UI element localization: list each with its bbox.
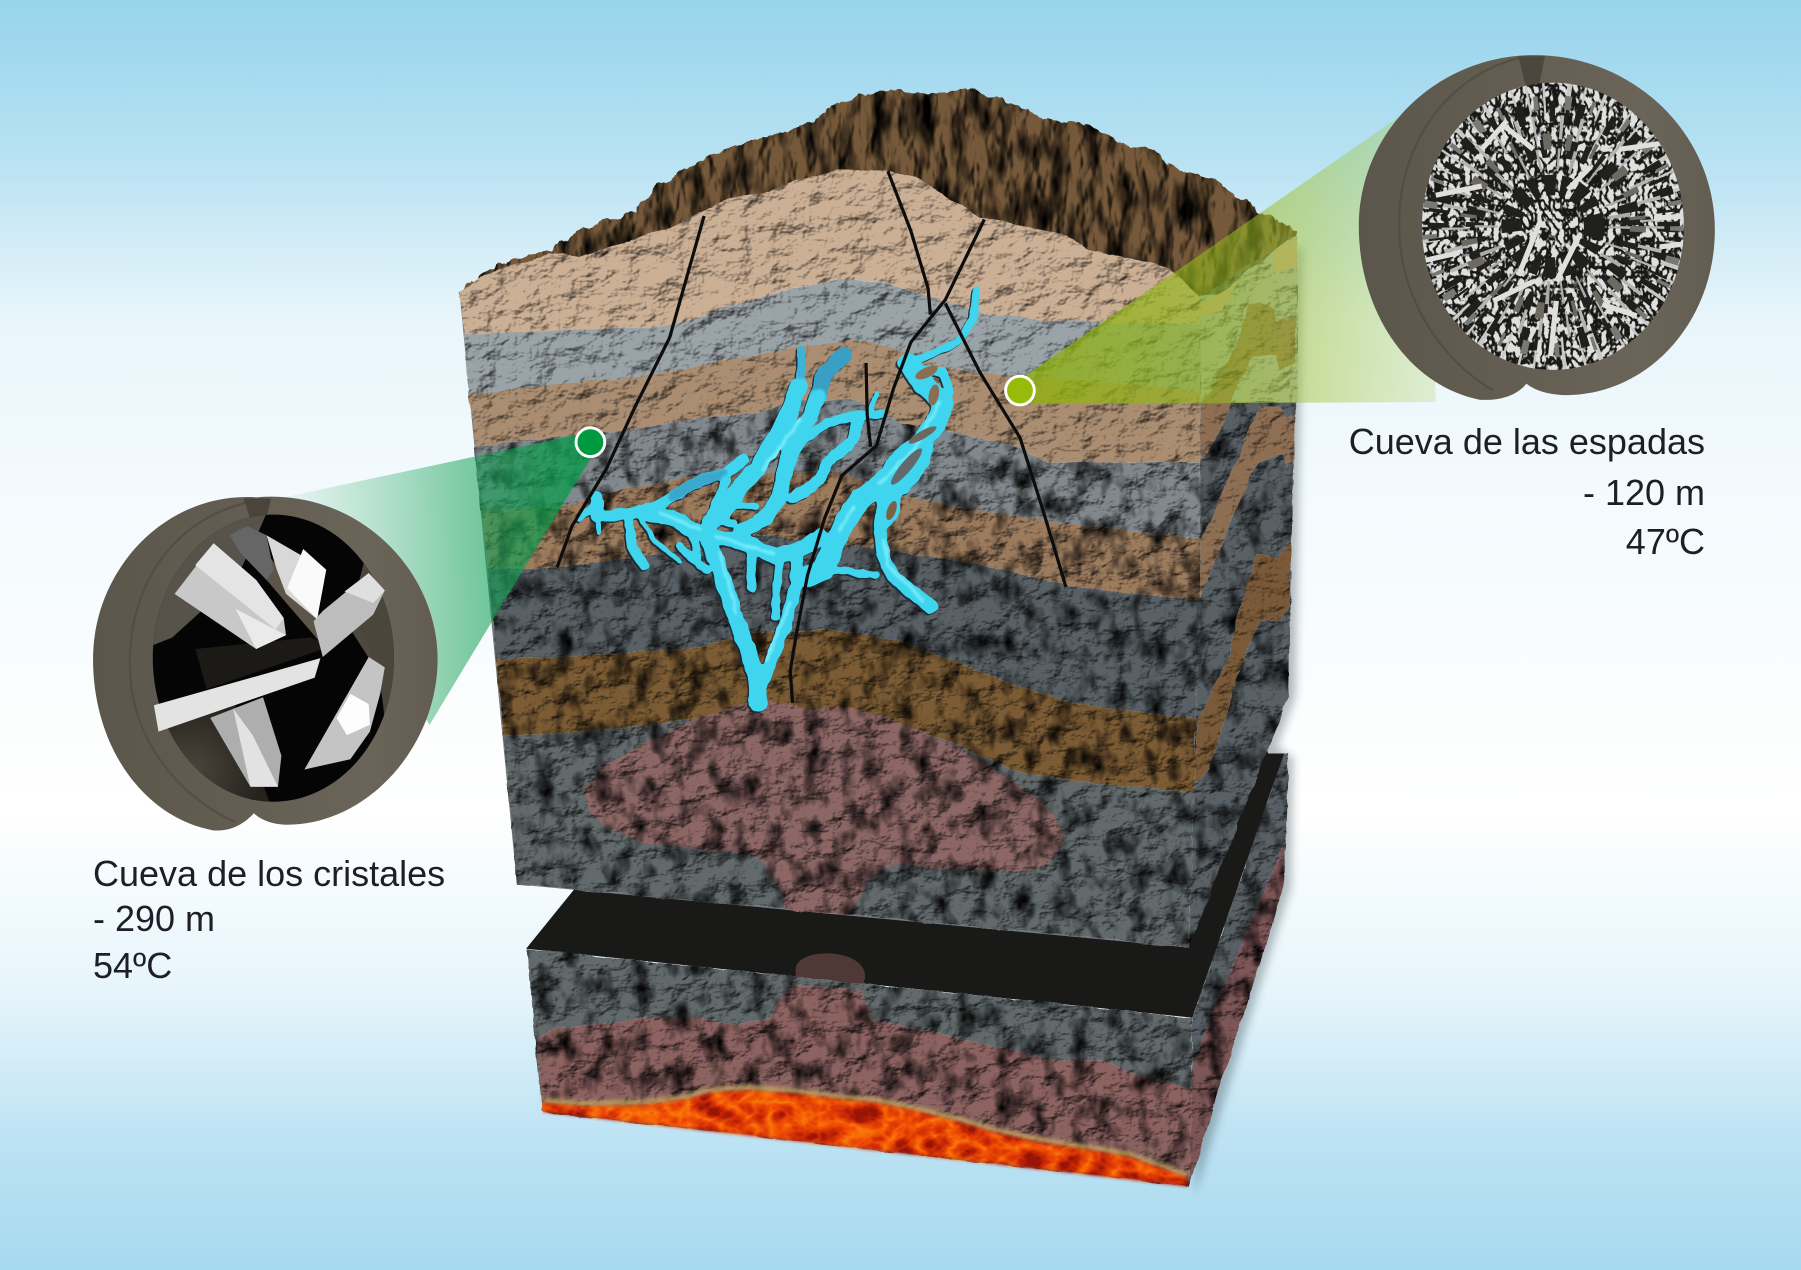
- vertical channel two: [740, 397, 818, 533]
- gray layer two: [474, 400, 1200, 539]
- marker lime right: [1006, 376, 1034, 405]
- horizontal channel: [650, 513, 820, 556]
- fault lines: [557, 171, 1066, 703]
- front face backing: [459, 292, 1200, 948]
- side upper gray: [1200, 235, 1298, 402]
- left network: [597, 460, 743, 517]
- side brown stripe two: [1200, 407, 1294, 598]
- front strata upper: [459, 170, 1200, 463]
- cavity with sword crystals: [1419, 80, 1688, 373]
- crystal right: [314, 573, 385, 657]
- lower block top face: [526, 735, 1284, 1018]
- shell rib between crystals: [266, 559, 320, 640]
- lower block side magma: [1189, 842, 1284, 1187]
- connector beams and location markers: [284, 98, 1436, 725]
- rock islands inside water: [884, 363, 941, 521]
- fault left: [557, 216, 704, 567]
- upper block: [459, 90, 1298, 948]
- upper-left cavity wall: [153, 515, 266, 645]
- mountain top surface: [459, 90, 1296, 301]
- upper block side face: [1189, 235, 1298, 948]
- label: cueva de los cristales: 54ºC: [93, 945, 172, 986]
- crystal lower centre: [210, 697, 281, 787]
- front strata lower: [474, 400, 1200, 948]
- beam to cave of swords: [1020, 98, 1436, 404]
- right branch: [880, 447, 931, 606]
- marker green left: [576, 428, 605, 457]
- crystal lower right: [304, 657, 385, 770]
- soft shadow behind blocks: [1195, 247, 1303, 1195]
- side tan patch top: [1274, 235, 1297, 275]
- crystal bar: [154, 658, 320, 732]
- side brown stripe one: [1200, 302, 1297, 462]
- shell: [93, 497, 438, 831]
- side brown stripe three: [1195, 540, 1291, 783]
- label: cueva de las espadas: 47ºC: [1626, 521, 1705, 562]
- brown layer three: [496, 629, 1196, 793]
- cavity wall: [168, 705, 269, 802]
- sphere: cueva de los cristales: [93, 497, 438, 831]
- crystal upper left: [175, 543, 286, 649]
- gray layer three: [488, 533, 1200, 719]
- shell seam crescent: [1399, 57, 1522, 391]
- shell top notch: [1518, 56, 1545, 85]
- vertical channel one top: [789, 350, 814, 383]
- gray veil softening contrast: [1419, 80, 1688, 373]
- label: cueva de los cristales: [93, 853, 445, 986]
- crystal top: [266, 535, 326, 619]
- cavity: [153, 515, 394, 802]
- lava: [542, 1090, 1189, 1187]
- small left branches: [628, 517, 645, 566]
- magma chamber: [583, 697, 1062, 915]
- fault long: [790, 219, 984, 703]
- shell: [1359, 55, 1715, 400]
- crystal dark facet: [230, 526, 273, 580]
- label: cueva de los cristales: Cueva de los cristales: [93, 853, 445, 894]
- centre loop: [790, 413, 883, 463]
- fault right: [945, 303, 1066, 587]
- label: cueva de las espadas: - 120 m: [1583, 472, 1705, 513]
- label: cueva de los cristales: - 290 m: [93, 898, 215, 939]
- crystals: [154, 526, 385, 787]
- brown layer two: [480, 472, 1200, 601]
- tan layer: [459, 170, 1200, 334]
- right main channel: [906, 291, 976, 365]
- geological block diagram: [459, 90, 1303, 1195]
- sphere: cueva de las espadas: [1359, 55, 1715, 400]
- side tan patch corner: [1200, 281, 1238, 317]
- V trunk right arm: [763, 556, 797, 680]
- lower block side face: [1189, 753, 1289, 1187]
- lower block front rock: [526, 949, 1192, 1187]
- prominent shards: [1419, 121, 1688, 356]
- label: cueva de las espadas: [1349, 421, 1705, 562]
- fault centre: [888, 171, 930, 315]
- gray layer four: [503, 712, 1195, 948]
- fault short: [866, 363, 871, 447]
- vertical channel two top: [818, 355, 843, 397]
- lava glow: [542, 1088, 1187, 1175]
- vertical channel one: [710, 387, 798, 523]
- magma conduit on top face: [793, 953, 865, 990]
- lower block magma layer: [538, 984, 1192, 1187]
- beam to cave of crystals: [284, 432, 590, 725]
- water highlights: [660, 403, 940, 660]
- label: cueva de las espadas: Cueva de las espadas: [1349, 421, 1705, 462]
- V trunk left arm: [707, 537, 757, 680]
- water network: [580, 291, 976, 702]
- shell top notch: [244, 498, 271, 519]
- lower block: [526, 735, 1289, 1187]
- brown layer one: [469, 340, 1200, 463]
- shell seam crescent: [130, 501, 255, 822]
- trunk base: [730, 673, 786, 702]
- gray layer one: [464, 279, 1200, 394]
- drips: [738, 550, 766, 588]
